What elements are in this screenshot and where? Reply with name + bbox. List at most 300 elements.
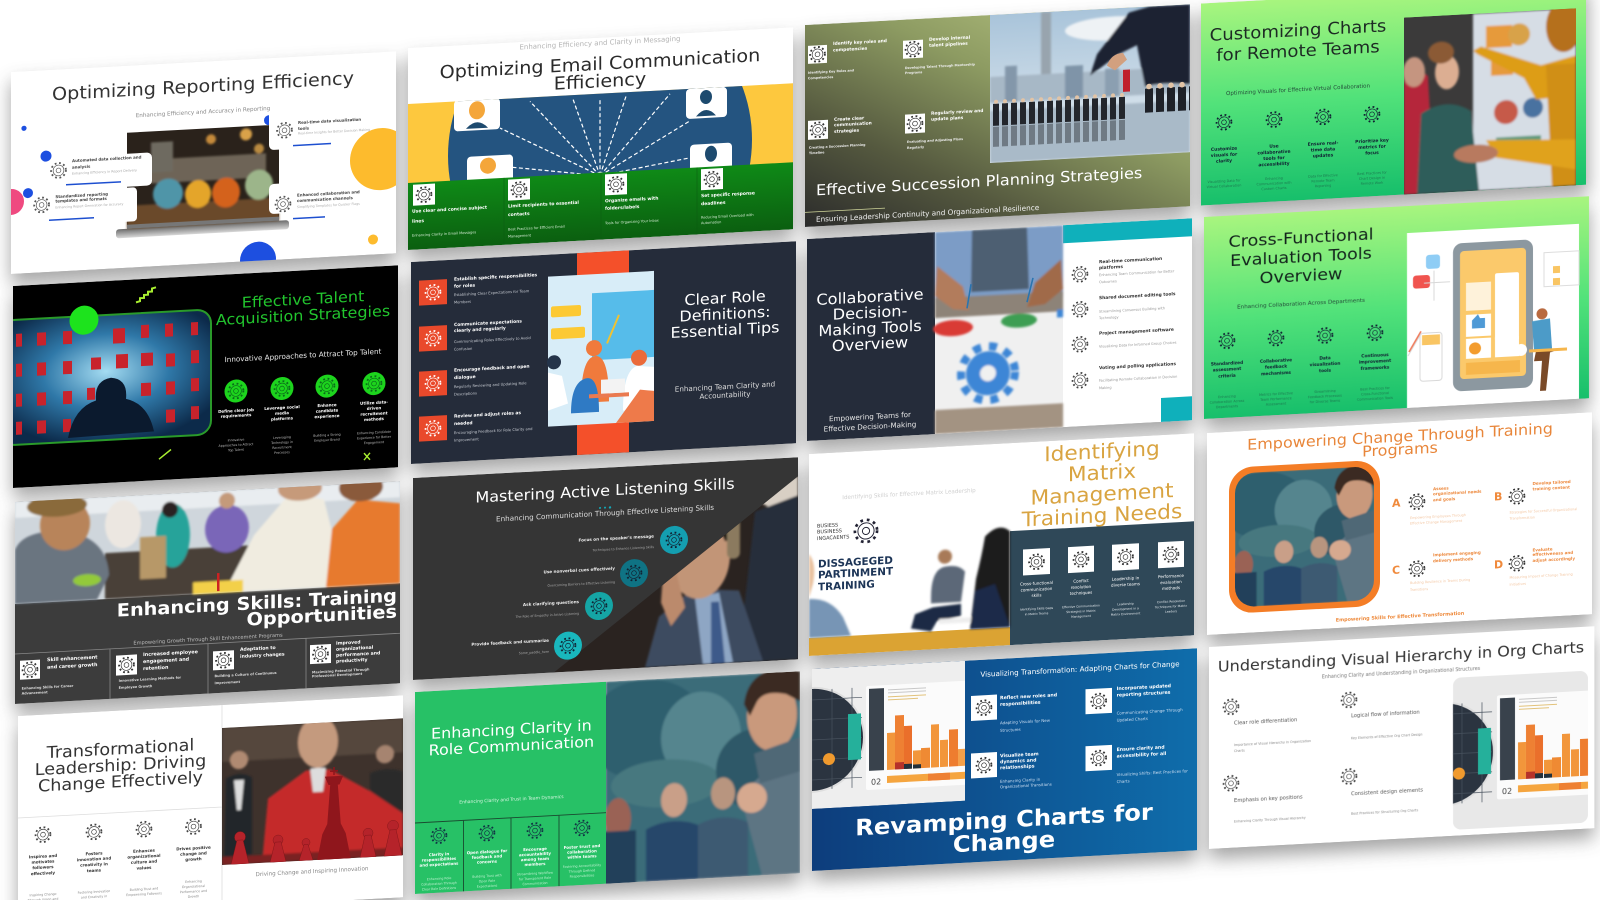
columns text: Cross-Functional	[1361, 391, 1389, 397]
columns text: Expectations	[477, 884, 498, 889]
columns text: Metrics for Effective	[1259, 391, 1293, 397]
tip 1: Establish specific responsibilities	[454, 272, 538, 283]
tip 2: clearly and regularly	[454, 325, 506, 334]
photo: training meeting	[15, 471, 400, 604]
tip 1: for roles	[454, 283, 475, 290]
item: real-time data: Real-time Insights for Better Decision Making	[298, 128, 370, 136]
item 3: strategies	[834, 128, 860, 135]
columns text: Remote Work	[1361, 181, 1383, 186]
slide: Cross-Functional Evaluation Tools	[1204, 196, 1589, 419]
skill columns: skills	[1031, 592, 1042, 598]
item 3: Organizational Transitions	[1000, 782, 1052, 789]
columns text: Employer Brand	[314, 437, 340, 443]
columns text: Collaboration Through	[421, 881, 457, 887]
listening tips: Ask clarifying questions	[523, 599, 580, 607]
item: real-time data: Real-time data visualization	[298, 117, 361, 125]
title: Making Tools	[818, 316, 922, 340]
columns text: Enhancing	[185, 879, 202, 884]
logo: INGACAENTS	[817, 534, 849, 542]
columns text	[27, 845, 211, 900]
step text: adjust accordingly	[1532, 556, 1575, 563]
item 2	[903, 34, 976, 75]
tip 2: contacts	[508, 211, 530, 218]
columns text: Building Trust and	[130, 886, 158, 892]
listening tips	[471, 534, 654, 658]
columns text: tools	[1319, 368, 1331, 374]
item 1	[1224, 695, 1311, 754]
item 1	[808, 38, 887, 80]
columns text: change and	[180, 850, 207, 857]
tip 2: Confusion	[454, 347, 473, 352]
columns text: Building Trust with	[472, 873, 502, 879]
item 1: Clear role differentiation	[1234, 717, 1297, 727]
columns text: growth	[185, 856, 202, 862]
columns text: among team	[521, 856, 549, 862]
skill columns: Performance	[1158, 573, 1184, 579]
title: Change	[953, 826, 1055, 858]
columns text: Collaborative	[1260, 357, 1292, 365]
columns text: Standardized	[1211, 360, 1243, 368]
listening tips: Techniques to Enhance Listening Skills	[592, 545, 654, 552]
skill columns: communication	[1021, 586, 1053, 593]
title: Revamping Charts for	[855, 798, 1153, 841]
skill columns: Management	[1071, 614, 1092, 619]
cell 1	[20, 655, 98, 696]
columns text: feedback and	[472, 853, 502, 860]
columns text: innovation and	[77, 855, 111, 862]
title: Enhancing Clarity in	[431, 717, 592, 743]
columns text: Visualizing Data for	[1208, 178, 1241, 184]
tip 2: Communicate expectations	[454, 319, 522, 328]
subtitle: Enhancing Communication Through Effective Listening Skills	[496, 503, 714, 524]
columns text: Top Talent	[227, 448, 245, 452]
tool 1: Real-time communication	[1099, 256, 1162, 265]
subtitle: Ensuring Leadership Continuity and Organizational Resilience	[816, 203, 1040, 224]
slide: Transformational Leadership	[18, 695, 403, 900]
phone illustration	[1407, 224, 1579, 408]
columns text: responsibilities	[422, 856, 457, 863]
listening tips: Overcoming Barriers to Effective Listening	[548, 580, 615, 588]
item: automated data	[51, 154, 142, 186]
columns text: metrics for	[1358, 144, 1387, 151]
item: standardized reporting: Standardized reporting	[55, 191, 108, 199]
item 3: Timeline	[809, 150, 824, 155]
item: enhanced collaboration: communication channels	[297, 195, 354, 203]
tip 3	[604, 172, 659, 225]
tip 2: Limit recipients to essential	[508, 200, 579, 210]
title: Effective Succession Planning Strategies	[816, 164, 1142, 199]
columns text: Open dialogue for	[467, 848, 507, 855]
columns text: Approaches to Attract	[219, 442, 254, 448]
icons row	[1220, 325, 1382, 349]
logo	[817, 519, 877, 545]
subtitle: Empowering Teams for	[829, 410, 911, 423]
title: Acquisition Strategies	[216, 302, 390, 329]
tip 3: Regularly Reviewing and Updating Role	[454, 381, 527, 389]
skill columns: Conflict	[1073, 578, 1089, 584]
columns text: Clear Role Definitions	[422, 886, 456, 892]
title: Training Needs	[1021, 500, 1182, 531]
team illustration	[547, 271, 654, 427]
cell 4: Professional Development	[312, 672, 363, 679]
columns text: followers	[32, 864, 54, 870]
columns text: driven	[367, 405, 381, 411]
title: Efficiency	[554, 69, 646, 95]
title: Definitions:	[679, 303, 771, 325]
columns text: frameworks	[1361, 365, 1390, 372]
photo: gears on paper	[933, 225, 1063, 434]
columns text: Remote Team	[1311, 178, 1335, 184]
columns text: Data	[1319, 355, 1331, 362]
item 1: competencies	[833, 46, 868, 53]
tool 2: Shared document editing tools	[1099, 291, 1176, 301]
item 2	[1086, 683, 1183, 724]
item 3: Enhancing Clarity in	[1000, 777, 1041, 784]
tip 1: Members	[454, 300, 471, 305]
slide: Optimizing Reporting Efficiency	[11, 52, 396, 274]
item 3: dynamics and	[1000, 757, 1036, 765]
skill columns: Effective Communication	[1062, 603, 1100, 609]
columns text: focus	[1365, 150, 1379, 157]
columns text: Responsibilities	[570, 873, 595, 879]
tool 4: Voting and polling applications	[1099, 361, 1176, 371]
title: Programs	[1362, 439, 1438, 461]
tip 3: Tools for Organizing Your Inbox	[604, 219, 659, 225]
title: Collaborative	[816, 285, 924, 309]
title: Customizing Charts	[1210, 17, 1386, 46]
columns text: Departments	[1216, 404, 1238, 409]
columns text: Performance and	[180, 889, 207, 894]
title: Management	[1031, 479, 1173, 510]
cell 3	[213, 644, 285, 685]
skill columns: Conflict Resolution	[1157, 599, 1185, 604]
title: Clear Role	[684, 287, 766, 309]
columns text: for Diverse Teams	[1310, 399, 1340, 404]
columns text: tools for	[1263, 155, 1285, 162]
title: Cross-Functional	[1228, 225, 1374, 252]
photo: pointing leader	[586, 667, 800, 893]
title: Change Effectively	[38, 768, 203, 796]
listening tips: Some_paddle_here	[519, 650, 549, 655]
dark panel	[1010, 521, 1194, 645]
tip 4	[701, 166, 755, 225]
columns text: Innovative	[228, 438, 244, 442]
columns text: Custom Charts	[1261, 186, 1287, 191]
title: Opportunities	[247, 602, 397, 630]
tip 1: Use clear and concise subject	[412, 205, 488, 215]
item 3: Creating a Succession Planning	[809, 143, 866, 150]
item 1: Competencies	[808, 75, 833, 80]
cell 2: engagement and	[143, 657, 190, 665]
columns text: organizational	[127, 853, 161, 860]
slide: Mastering Active Listening	[413, 457, 798, 680]
step text: Strategies for Successful Organizational	[1510, 507, 1577, 515]
title: for Remote Teams	[1216, 38, 1380, 66]
photo: coaching session	[809, 527, 1010, 638]
letters: B	[1494, 490, 1502, 504]
columns text: Inspires and	[29, 853, 57, 859]
columns text: Through Defined	[568, 868, 595, 874]
photo: man listening	[554, 457, 798, 672]
tip 4: Encouraging Feedback for Role Clarity and	[454, 427, 532, 435]
tip 3: folders/labels	[605, 204, 640, 212]
columns text: members	[525, 861, 546, 867]
cell 2: Employee Growth	[119, 684, 153, 690]
columns text: improvement	[1359, 358, 1391, 366]
columns text: Ensure real-	[1308, 140, 1338, 148]
tip 3: Organize emails with	[605, 196, 658, 204]
decorative squiggles	[136, 286, 370, 460]
footer caption: Empowering Skills for Effective Transformation	[1336, 611, 1465, 624]
listening tips: Provide feedback and summarize	[471, 638, 549, 647]
tool 1: Outcomes	[1099, 279, 1117, 284]
skill columns: Leaders	[1165, 609, 1177, 614]
item 3: communication	[834, 120, 872, 128]
slide: Empowering Change Through Training	[1207, 412, 1592, 635]
step text: delivery methods	[1433, 556, 1474, 563]
columns text: assessment	[1213, 366, 1241, 374]
slide: Effective Talent Acquisition	[1, 265, 398, 489]
columns text: collaboration	[567, 848, 597, 855]
cell 4: organizational	[336, 645, 374, 653]
columns text: creativity in	[80, 861, 108, 868]
item 4: Consistent design elements	[1351, 787, 1423, 797]
columns text: methods	[364, 416, 385, 422]
item 2: Incorporate updated	[1117, 683, 1171, 692]
skill columns: methods	[1162, 585, 1180, 591]
item 1	[971, 691, 1057, 734]
columns text: visuals for	[1211, 152, 1238, 159]
columns text: media	[275, 410, 289, 416]
title: Matrix	[1068, 459, 1136, 486]
columns text: Enhancing	[1218, 394, 1236, 399]
step text: Implement engaging	[1433, 550, 1481, 557]
item 3	[808, 115, 872, 155]
item 2: Updated Charts	[1117, 716, 1148, 723]
yellow strip	[809, 627, 1010, 656]
columns text: culture and	[131, 859, 157, 865]
tool 2	[1073, 291, 1176, 322]
item 3: Emphasis on key positions	[1234, 794, 1303, 804]
title: Mastering Active Listening Skills	[475, 475, 735, 507]
columns text: Building a Strong	[313, 432, 341, 438]
title: Optimizing Email Communication	[440, 46, 760, 83]
item: enhanced collaboration: Simplifying Templates for Quicker Flags	[297, 202, 360, 209]
columns text: Enhancing	[1265, 176, 1283, 181]
columns text: Organizational	[182, 884, 205, 889]
poster text: PARTINMENT	[818, 565, 894, 582]
skill columns: techniques	[1070, 590, 1092, 596]
subtitle: Identifying Skills for Effective Matrix Leadership	[842, 488, 976, 501]
item 1: Identifying Key Roles and	[808, 68, 855, 75]
listening tips: The Role of Empathy in Active Listening	[515, 612, 579, 619]
skill columns: in Matrix Teams	[1025, 611, 1049, 616]
skill columns: Matrix Environment	[1111, 611, 1141, 617]
item: real-time data: tools	[298, 125, 310, 131]
columns text: Processes	[274, 450, 290, 455]
item 2: Developing Talent Through Mentorship	[905, 62, 976, 70]
slide: Identifying Matrix Management Training	[809, 433, 1194, 656]
title: Identifying	[1044, 437, 1160, 466]
slide: Revamping Charts for Change	[759, 648, 1197, 874]
tip 4: Set specific response	[701, 190, 755, 199]
tip 2	[508, 176, 579, 239]
network illustration	[448, 86, 752, 181]
columns text: Continuous	[1361, 352, 1389, 360]
columns text: Chart Design in	[1359, 176, 1385, 181]
skill columns: Techniques for Matrix	[1154, 604, 1187, 609]
slide: Customizing Charts for Remote Teams	[1201, 0, 1586, 205]
columns text: Open Role	[479, 879, 495, 884]
columns text: Best Practices for	[1357, 170, 1387, 176]
step text: organizational needs	[1433, 489, 1482, 496]
progress dots	[599, 506, 611, 509]
title: Effective Talent	[242, 288, 364, 312]
step text: effectiveness and	[1532, 550, 1573, 557]
item: standardized reporting: Enhancing Report Generation for Accuracy	[55, 202, 124, 210]
skill columns: diverse teams	[1111, 581, 1140, 588]
step text: training content	[1532, 484, 1570, 491]
step text: Transformation	[1509, 515, 1535, 521]
item 4: accessibility for all	[1117, 751, 1167, 760]
tip 3: Descriptions	[454, 391, 477, 397]
item 1: Structures	[1000, 727, 1021, 733]
columns text: Best Practices for	[1360, 386, 1390, 392]
tool 1	[1073, 255, 1175, 286]
columns text: Foster trust and	[564, 843, 600, 850]
columns text	[1207, 137, 1389, 194]
columns text: Growth	[188, 894, 199, 899]
cell 3: Adaptation to	[240, 645, 276, 653]
tip 4: needed	[454, 420, 473, 427]
tip 4: Review and adjust roles as	[454, 410, 521, 420]
columns text: Virtual Collaboration	[1207, 183, 1241, 189]
tip 4	[419, 409, 532, 445]
listening tips: Use nonverbal cues effectively	[543, 566, 615, 574]
step icons	[1410, 489, 1524, 577]
columns text	[218, 399, 392, 458]
subtitle: Enhancing Collaboration Across Departments	[1237, 298, 1365, 311]
item: automated data: analysis	[72, 164, 91, 170]
title: Decision-	[833, 301, 907, 324]
columns text: Enhance	[317, 402, 337, 408]
tool 4	[1073, 361, 1177, 392]
columns text: Customize	[1211, 146, 1237, 153]
teal icon circles	[554, 525, 688, 660]
columns text: Communication with	[1257, 181, 1291, 187]
columns text: Clarity in	[429, 851, 449, 857]
tip 1	[412, 181, 488, 238]
columns text: requirements	[221, 412, 252, 419]
tip 2: Communicating Roles Effectively to Avoid	[454, 336, 531, 344]
item 4	[1342, 765, 1423, 816]
columns text: teams	[87, 868, 102, 873]
talent network image	[1, 309, 211, 446]
title: Role Communication	[429, 733, 594, 759]
skill columns: Leadership	[1117, 602, 1134, 606]
columns text: Engagement	[364, 440, 385, 445]
skill columns: evaluation	[1160, 579, 1182, 585]
columns text: effectively	[31, 870, 55, 876]
item 2: reporting structures	[1117, 690, 1171, 699]
columns text: Leverage social	[264, 404, 300, 411]
step text: Effective Change Management	[1410, 519, 1463, 526]
tip 3: dialogue	[454, 374, 476, 381]
laptop with piggy bank photo	[116, 124, 289, 238]
framed photo	[1221, 460, 1380, 614]
columns text: Reporting	[1315, 183, 1331, 188]
skill columns: resolution	[1071, 584, 1092, 590]
tip 2: Management	[508, 233, 532, 239]
columns text: Enhancing Role	[427, 876, 451, 881]
subtitle: Enhancing Clarity and Understanding in Organizational Structures	[1322, 666, 1481, 680]
columns text: Drives positive	[176, 845, 211, 851]
columns text: Collaboration Across	[1210, 399, 1245, 405]
tool 4: Making	[1099, 386, 1112, 390]
cell 2	[116, 649, 199, 690]
cell 3: Improvement	[215, 680, 240, 685]
item 4: Visualizing Shifts: Best Practices for	[1117, 768, 1188, 777]
columns text: Data for Effective	[1308, 173, 1338, 179]
item 4: Ensure clarity and	[1117, 745, 1165, 753]
logo: BUSIESS	[817, 522, 838, 530]
subtitle: Enhancing Team Clarity and	[675, 379, 775, 394]
columns text: Technology in	[270, 440, 293, 445]
cell 4: performance and	[336, 650, 380, 659]
logo: BUSINESS	[817, 528, 842, 536]
tip 1: lines	[412, 218, 424, 225]
columns text: Recruitment	[272, 445, 293, 450]
tool 3: Visualizing Data for Informed Group Choices	[1099, 341, 1177, 349]
tool 3	[1073, 327, 1177, 352]
columns text: Team Performance	[1259, 396, 1292, 402]
columns text: criteria	[1218, 373, 1236, 380]
columns text: Utilize data-	[360, 399, 388, 406]
title: Essential Tips	[671, 319, 779, 342]
photo: red chess king	[222, 711, 403, 865]
step text: Transitions	[1409, 587, 1428, 592]
slide: Enhancing Skills Training	[15, 471, 400, 704]
green tips band	[408, 162, 793, 250]
columns text: visualization	[1310, 361, 1340, 368]
poster text: DISSAGEGED	[818, 554, 893, 571]
cell 2: Increased employee	[143, 649, 199, 658]
item 3: Enhancing Clarity Through Visual Hierarchy	[1234, 816, 1306, 824]
columns text: clarity	[1216, 158, 1232, 165]
columns text: and Creativity in	[81, 894, 107, 900]
tip 1: Establishing Clear Expectations for Team	[454, 289, 530, 297]
columns text	[420, 843, 601, 892]
columns text: candidate	[316, 407, 339, 414]
step text: Assess	[1433, 485, 1449, 491]
top subtitle: Enhancing Efficiency and Clarity in Messaging	[519, 35, 681, 52]
item 4: update plans	[931, 115, 964, 123]
item 1: Reflect new roles and	[1000, 692, 1057, 701]
chart visual	[759, 660, 976, 812]
cell 4: Improved	[336, 639, 361, 647]
item 3: Visualize team	[1000, 751, 1039, 759]
title: Transformational	[46, 736, 194, 763]
item 2: Key Elements of Effective Org Chart Design	[1351, 733, 1423, 740]
cell 1: Enhancing Skills for Career	[22, 684, 74, 691]
columns text: Fostering Innovation	[78, 889, 110, 895]
title: Evaluation Tools	[1230, 244, 1372, 271]
item 2: Develop internal	[929, 35, 971, 43]
skill columns: Identifying Skills Gaps	[1020, 606, 1054, 612]
item 4: Evaluating and Adjusting Plans	[907, 137, 963, 144]
cell 2: retention	[143, 665, 169, 672]
item 4: Best Practices for Structuring Org Charts	[1351, 808, 1418, 816]
